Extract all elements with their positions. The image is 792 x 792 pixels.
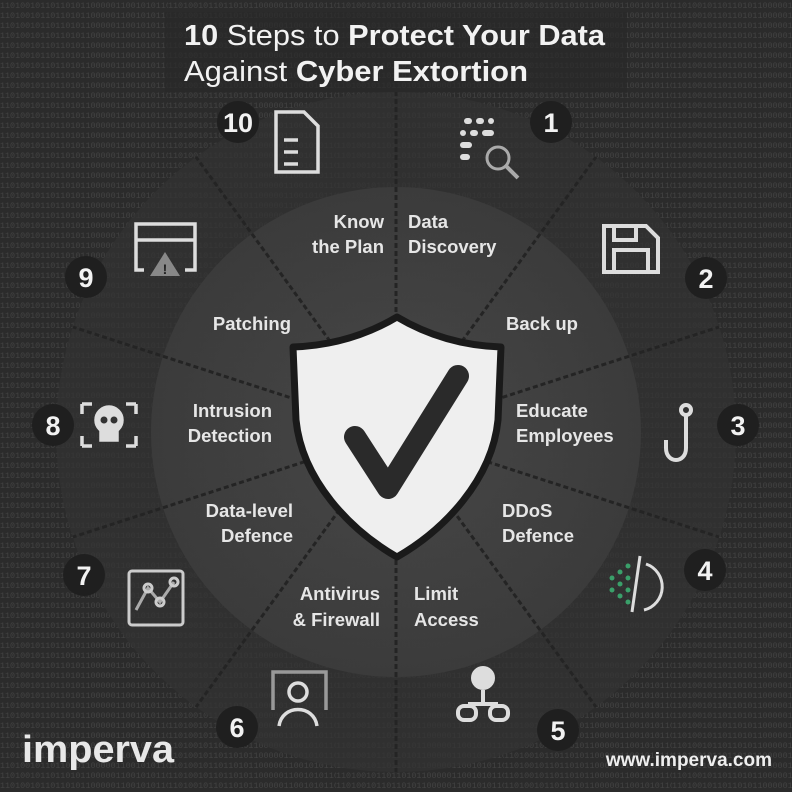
- text: 5: [550, 716, 566, 746]
- step labels: [188, 211, 614, 630]
- step labels: Data-level: [206, 500, 293, 521]
- icon: hook: [666, 405, 691, 460]
- step labels: Back up: [506, 313, 578, 334]
- icon: intrusion skull: [82, 404, 136, 446]
- step labels: Patching: [213, 313, 291, 334]
- text: 7: [76, 561, 92, 591]
- text: 8: [45, 411, 61, 441]
- url: www.imperva.com: [605, 750, 772, 771]
- icon: browser warning: !: [163, 261, 167, 277]
- icon: skull network: [458, 668, 508, 720]
- step labels: Defence: [221, 525, 293, 546]
- text: 4: [697, 556, 713, 586]
- step labels: Data: [408, 211, 449, 232]
- text: 2: [698, 264, 714, 294]
- text: 1: [543, 108, 559, 138]
- text: 9: [78, 263, 94, 293]
- icon: floppy: [604, 226, 658, 272]
- text: 3: [730, 411, 746, 441]
- shield: [293, 317, 501, 557]
- text: 10: [223, 108, 253, 138]
- step labels: Detection: [188, 425, 272, 446]
- step labels: Limit: [414, 583, 458, 604]
- step labels: & Firewall: [293, 609, 380, 630]
- icon: user screen: [273, 672, 326, 726]
- step labels: Employees: [516, 425, 614, 446]
- step labels: Defence: [502, 525, 574, 546]
- text: 6: [229, 713, 245, 743]
- step labels: Intrusion: [193, 400, 272, 421]
- step labels: Discovery: [408, 236, 497, 257]
- step labels: DDoS: [502, 500, 552, 521]
- step labels: Access: [414, 609, 479, 630]
- title: 10 Steps to Protect Your Data: [184, 20, 606, 52]
- icon: ddos: [610, 556, 662, 612]
- step labels: Know: [334, 211, 385, 232]
- number badges: [32, 101, 759, 751]
- icon: data discovery: [460, 118, 518, 178]
- icon: checklist doc: [276, 112, 318, 172]
- step labels: Educate: [516, 400, 588, 421]
- title: [184, 20, 606, 88]
- icon: browser warning: [136, 224, 195, 277]
- step labels: Antivirus: [300, 583, 380, 604]
- step labels: the Plan: [312, 236, 384, 257]
- title: Against Cyber Extortion: [184, 56, 528, 88]
- icon: analytics: [129, 571, 183, 625]
- logo: imperva: imperva: [22, 729, 175, 771]
- title backdrop: [165, 12, 627, 92]
- outer ring: [56, 92, 736, 772]
